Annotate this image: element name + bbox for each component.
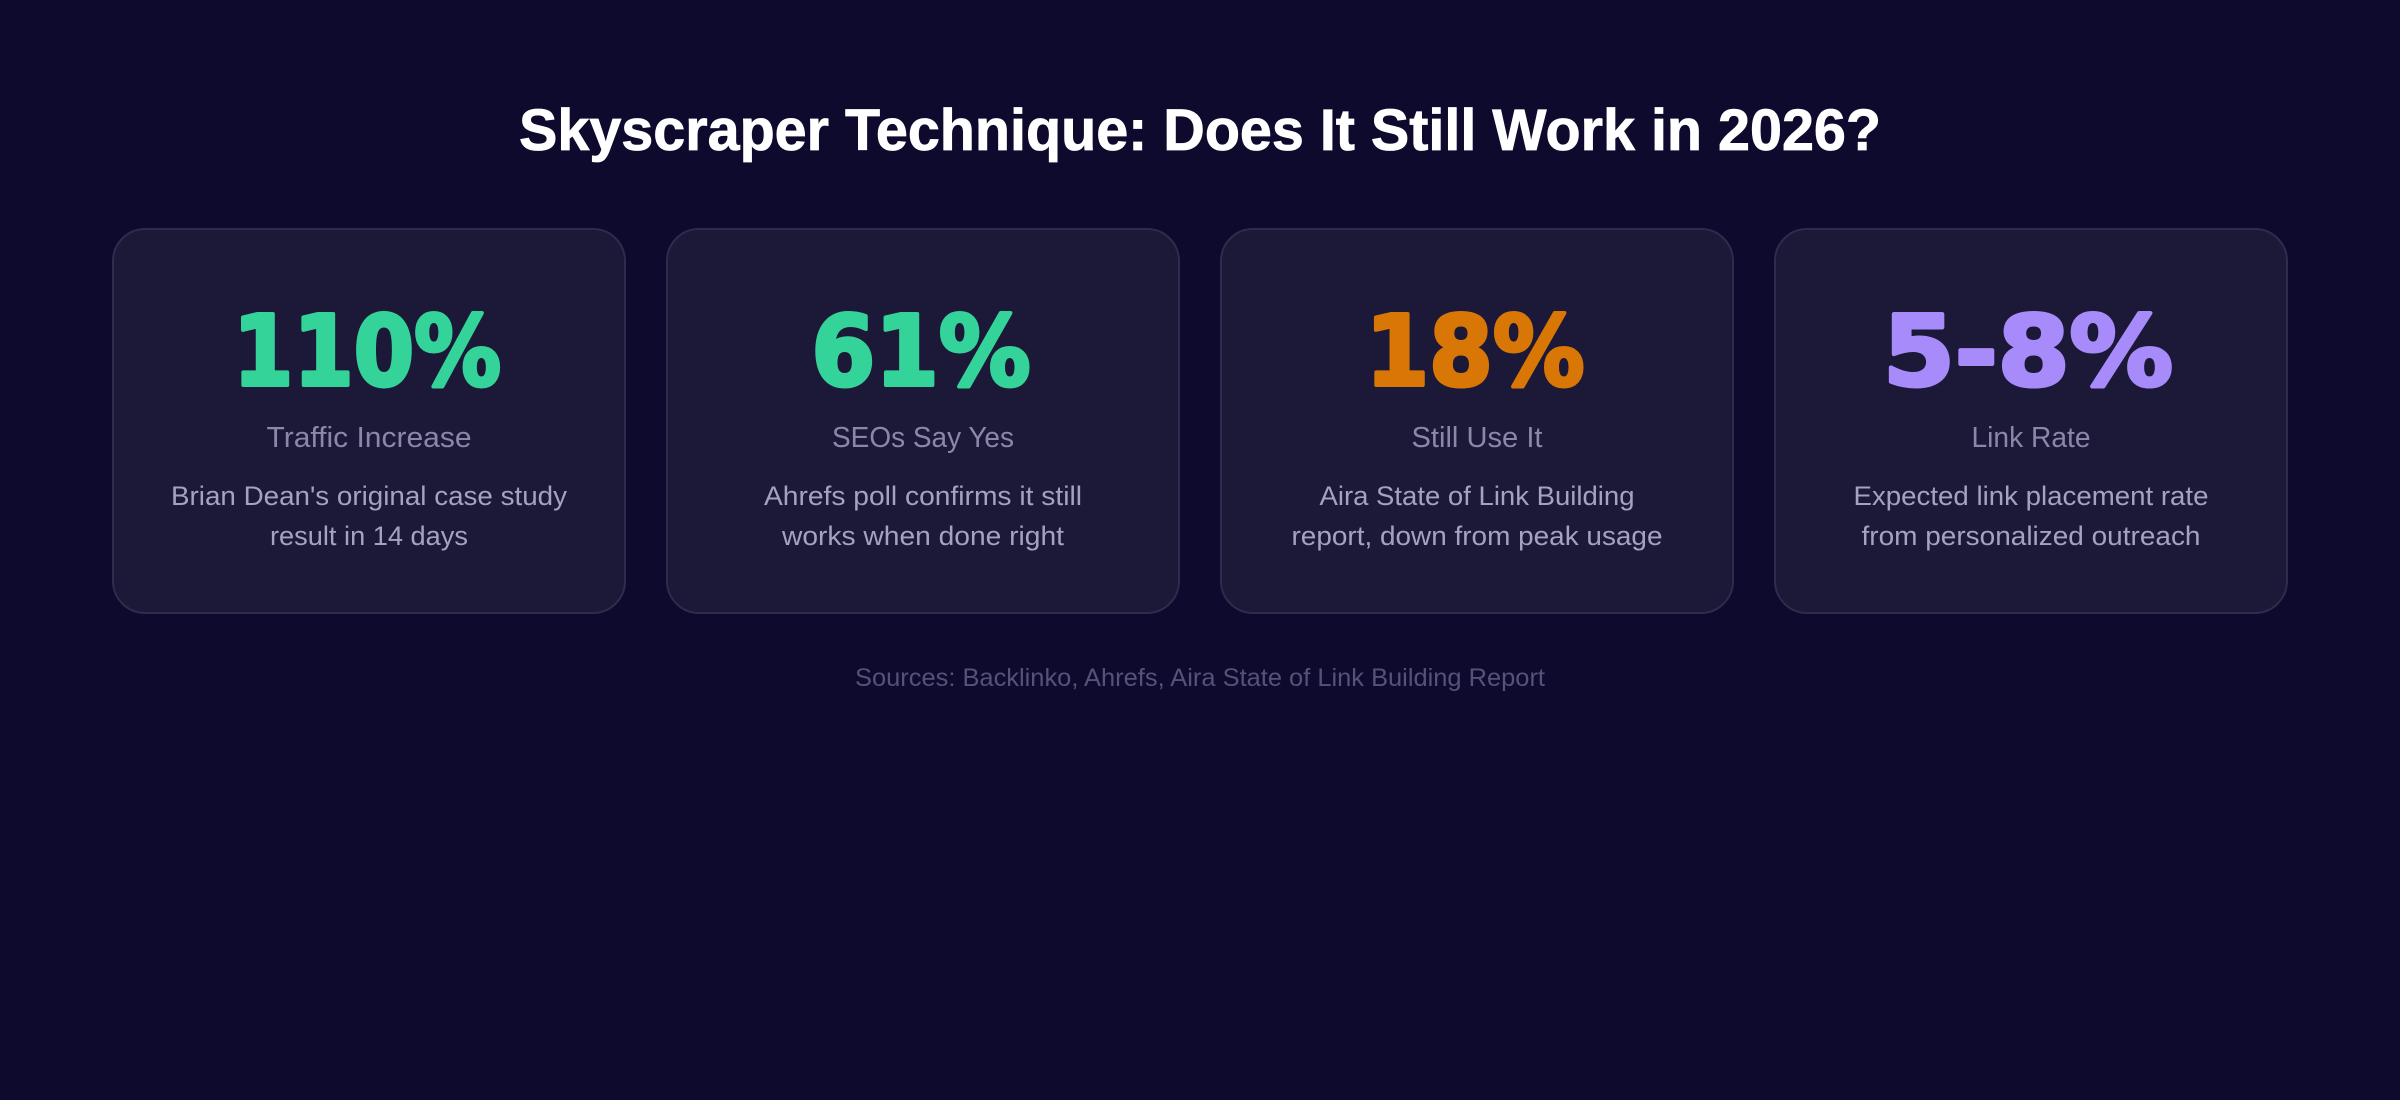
description: Aira report: report, down from peak usage (1292, 521, 1662, 551)
label: SEOs say yes: SEOs Say Yes (832, 422, 1014, 454)
panel: SEOs say yes (667, 229, 1179, 613)
stat: 18%: 18% (1366, 295, 1584, 408)
panel: traffic increase (113, 229, 625, 613)
description: Ahrefs poll: works when done right (781, 521, 1065, 551)
stat: 110%: 110% (233, 295, 501, 408)
description: Aira report: Aira State of Link Building (1320, 481, 1634, 511)
description: personalized outreach (1854, 481, 2208, 551)
description: case study (171, 481, 568, 551)
description: Ahrefs poll: Ahrefs poll confirms it still (764, 481, 1082, 511)
description: personalized outreach: from personalized outreach (1862, 521, 2200, 551)
description: personalized outreach: Expected link placement rate (1854, 481, 2208, 511)
stat: 61%: 61% (812, 295, 1030, 408)
description: Aira report (1292, 481, 1662, 551)
label: still use it: Still Use It (1412, 422, 1542, 454)
description: Ahrefs poll (764, 481, 1082, 551)
description: case study: result in 14 days (270, 521, 468, 551)
sources footnote: Sources: Backlinko, Ahrefs, Aira State of Link Building Report (855, 664, 1545, 692)
description: case study: Brian Dean's original case study (171, 481, 568, 511)
title: Skyscraper Technique: Does It Still Work in 2026? (519, 98, 1881, 163)
panel: still use it (1221, 229, 1733, 613)
label: traffic increase: Traffic Increase (266, 422, 472, 454)
label: link rate: Link Rate (1972, 422, 2090, 454)
panel: link rate (1775, 229, 2287, 613)
stat: 5-8%: 5-8% (1883, 295, 2173, 408)
